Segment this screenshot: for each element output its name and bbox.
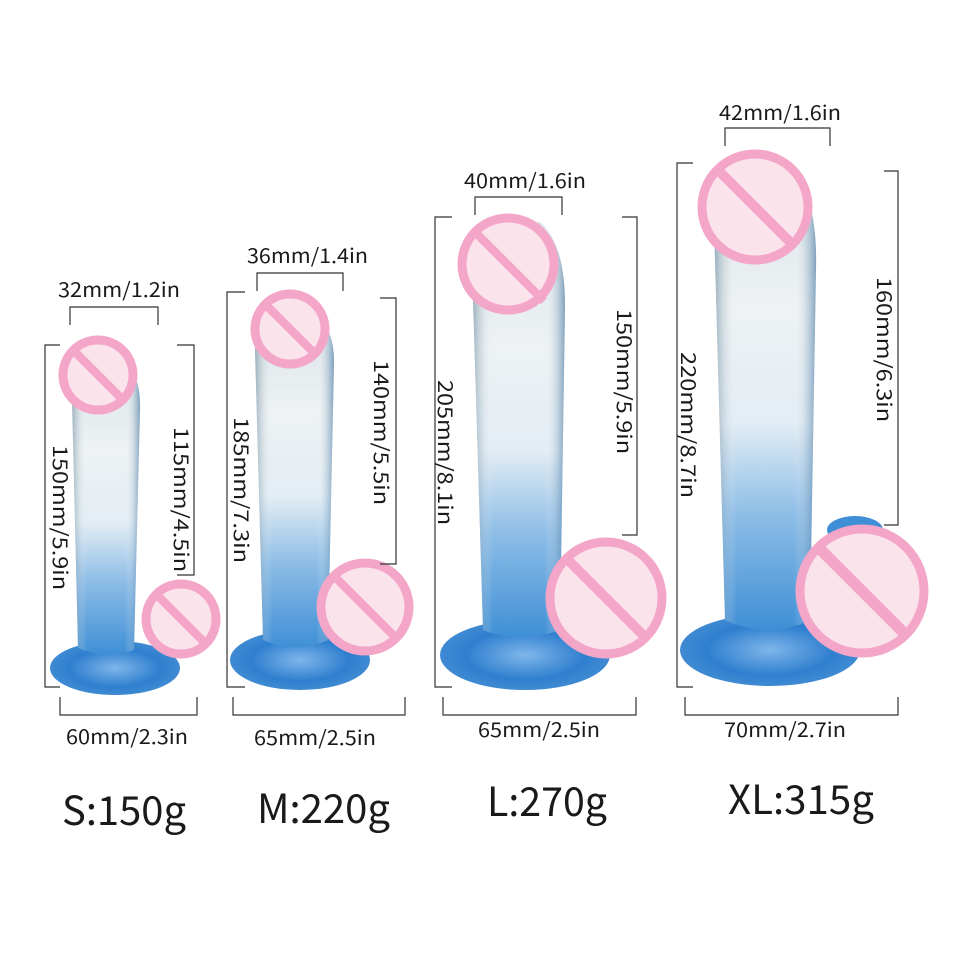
insertable bracket S	[177, 345, 194, 575]
panel: size S	[45, 274, 216, 837]
base bracket XL	[685, 697, 898, 715]
weight XL: XL:315g	[728, 768, 874, 826]
censor badge top L	[462, 218, 554, 310]
insertable bracket XL	[884, 171, 898, 525]
length label S: 150mm/5.9in	[47, 445, 76, 590]
length bracket L	[435, 217, 452, 687]
panel: size XL	[675, 97, 924, 826]
censor badge top S	[63, 340, 133, 410]
censor badge bottom M	[321, 563, 409, 651]
panel: size M	[227, 240, 409, 835]
panel: size L	[432, 165, 662, 828]
insertable label M: 140mm/5.5in	[368, 360, 397, 505]
insertable bracket L	[622, 217, 637, 535]
censor badge top M	[255, 294, 325, 364]
censor badge bottom L	[550, 542, 662, 654]
censor badge bottom XL	[800, 529, 924, 653]
base bracket M	[233, 697, 405, 715]
width label XL: 42mm/1.6in	[719, 97, 841, 126]
length label L: 205mm/8.1in	[432, 380, 461, 525]
length bracket M	[227, 292, 245, 687]
length label XL: 220mm/8.7in	[675, 352, 704, 498]
product illustration S	[50, 362, 180, 695]
product illustration L	[440, 222, 610, 690]
weight M: M:220g	[257, 777, 390, 835]
insertable label L: 150mm/5.9in	[611, 309, 640, 454]
product illustration XL	[680, 170, 883, 686]
base label XL: 70mm/2.7in	[724, 714, 846, 743]
weight S: S:150g	[62, 779, 186, 837]
length label M: 185mm/7.3in	[228, 417, 257, 563]
width label M: 36mm/1.4in	[247, 240, 368, 269]
width bracket L	[475, 197, 562, 215]
product illustration M	[230, 312, 370, 690]
insertable label S: 115mm/4.5in	[168, 427, 197, 572]
width bracket XL	[725, 128, 830, 146]
insertable label XL: 160mm/6.3in	[871, 277, 900, 422]
weight L: L:270g	[487, 770, 607, 828]
insertable bracket M	[380, 298, 396, 564]
width bracket M	[257, 273, 343, 291]
base label L: 65mm/2.5in	[478, 714, 600, 743]
censor badge top XL	[702, 154, 808, 260]
censor badge bottom S	[146, 584, 216, 654]
base label M: 65mm/2.5in	[254, 722, 376, 751]
width label L: 40mm/1.6in	[464, 165, 586, 194]
base bracket S	[60, 697, 197, 715]
width label S: 32mm/1.2in	[58, 274, 180, 303]
base bracket L	[443, 697, 636, 715]
length bracket S	[45, 345, 60, 687]
base label S: 60mm/2.3in	[66, 721, 188, 750]
width bracket S	[70, 307, 158, 325]
length bracket XL	[677, 163, 693, 687]
